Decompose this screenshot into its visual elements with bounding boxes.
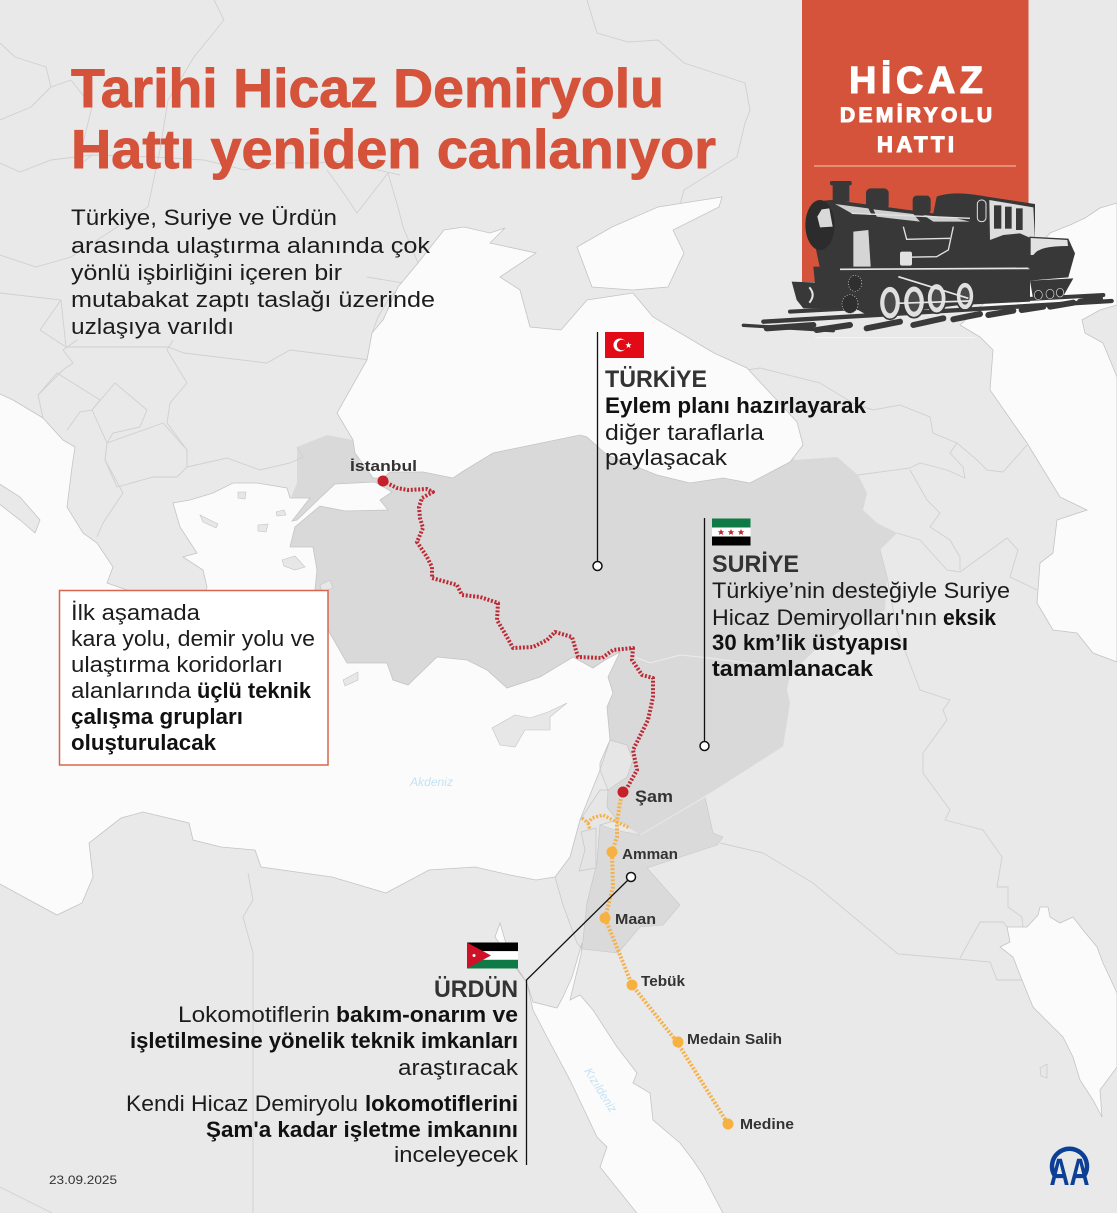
panel title [840,60,992,157]
callout: üçlü teknik çalışma grupları: kara yolu, demir yolu ve [71,626,315,651]
sea: Kızıldeniz [495,923,725,1215]
panel title: HİCAZ [849,60,983,102]
pointer dot [593,562,602,570]
marker: İstanbul [378,476,388,486]
panel: Ürdün: Lokomotiflerin [178,1002,330,1027]
Lübnan [600,740,633,790]
callout: üçlü teknik çalışma grupları: üçlü teknik [197,678,312,703]
city labels: İstanbul [350,458,417,475]
date: 23.09.2025 [49,1173,117,1187]
panel: Ürdün: ÜRDÜN [434,976,518,1003]
route: İstanbul to Şam railway [378,476,653,798]
panel: Ürdün [126,872,636,1167]
callout: üçlü teknik çalışma grupları: alanlarında [71,678,192,703]
İsrail [555,790,617,949]
cab [989,200,1035,240]
panel: Ürdün: inceleyecek [394,1142,519,1167]
callout: üçlü teknik çalışma grupları: İlk aşamada [71,600,201,625]
panel: Ürdün: işletilmesine yönelik teknik imkanları [130,1028,518,1053]
city labels: Tebük [641,973,686,990]
panel: Hicaz Demiryolu Hattı [802,0,1028,282]
callout: üçlü teknik çalışma grupları: oluşturulacak [71,730,217,755]
route: Şam to Medine railway [582,792,734,1130]
sea: Akdeniz and Adriyatik [0,393,620,915]
panel: Ürdün: Kendi Hicaz Demiryolu [126,1091,358,1116]
panel: Türkiye: paylaşacak [605,445,728,470]
sea: Basra Körfezi [1000,907,1117,1117]
locomotive body [808,193,1035,272]
icon: steam locomotive [743,181,1112,338]
panel: Suriye [700,518,1010,750]
flag: Türkiye [605,332,644,358]
pointer dot [626,872,636,882]
intro text [71,205,435,339]
callout: üçlü teknik çalışma grupları [60,590,328,765]
panel: Suriye: tamamlanacak [712,656,874,681]
highlighted: Türkiye and Suriye [285,435,897,835]
marker: Şam [618,786,628,798]
intro text: Türkiye, Suriye ve Ürdün [71,205,337,230]
title [71,57,716,180]
panel: Ürdün: Şam'a kadar işletme imkanını [206,1117,518,1142]
Batı Şeria [579,828,596,871]
panel: Ürdün: lokomotiflerini [365,1091,518,1116]
flag: Suriye [712,518,750,546]
city labels: Amman [622,846,678,863]
panel: Ürdün: araştıracak [398,1055,519,1080]
sea: İtalya topuğu [0,483,40,533]
intro text: yönlü işbirliğini içeren bir [71,260,342,285]
sea: Hazar [960,203,1117,662]
title: Hattı yeniden canlanıyor [71,118,716,180]
panel: Ürdün: bakım-onarım ve [336,1002,518,1027]
city labels: Medain Salih [687,1031,782,1048]
panel title: DEMİRYOLU [840,104,992,127]
title: Tarihi Hicaz Demiryolu [71,57,664,119]
city labels: Şam [635,787,673,806]
intro text: arasında ulaştırma alanında çok [71,233,431,258]
highlighted: Ürdün [582,797,723,953]
panel: Suriye: SURİYE [712,551,799,578]
panel: Suriye: Türkiye’nin desteğiyle Suriye [712,578,1010,603]
panel: Suriye: 30 km’lik üstyapısı [712,630,908,655]
city labels: Maan [615,911,656,928]
panel: Suriye: eksik [943,605,997,630]
sea labels: Kızıldeniz [581,1065,620,1115]
sea labels: Akdeniz [409,775,453,789]
stops [600,846,734,1130]
panel: Suriye: Hicaz Demiryolları'nın [712,605,937,630]
panel: Türkiye [593,332,867,570]
panel: Türkiye: TÜRKİYE [605,366,707,393]
chassis [813,267,1030,317]
callout: üçlü teknik çalışma grupları: ulaştırma koridorları [71,652,283,677]
islands [200,492,1047,1078]
intro text: uzlaşıya varıldı [71,314,234,339]
icon: AA logo: AA [1050,1152,1090,1194]
pointer dot [700,742,709,750]
intro text: mutabakat zaptı taslağı üzerinde [71,287,435,312]
sea labels [409,775,620,1115]
sea: Azak [577,197,722,290]
icon: AA logo [1050,1149,1090,1194]
panel: Türkiye: diğer taraflarla [605,420,765,445]
tender [1029,237,1075,281]
panel: Türkiye: Eylem planı hazırlayarak [605,393,867,418]
panel title: HATTI [877,132,954,157]
flag: Ürdün [467,942,518,968]
sea: Karadeniz [337,227,803,483]
city labels [350,458,794,1133]
city labels: Medine [740,1116,794,1133]
callout: üçlü teknik çalışma grupları: çalışma grupları [71,704,243,729]
